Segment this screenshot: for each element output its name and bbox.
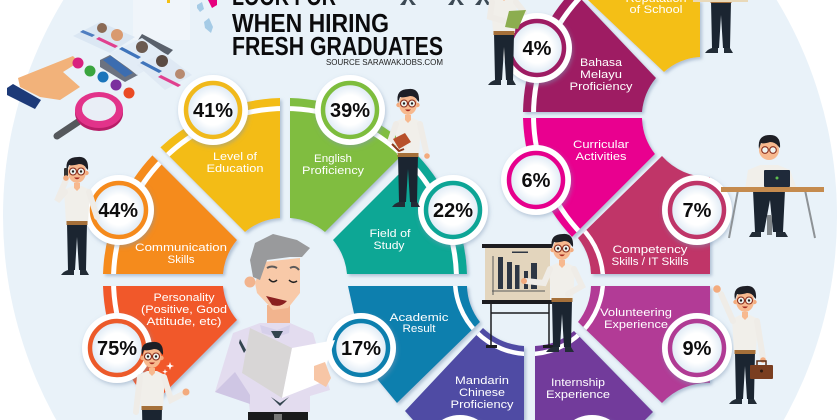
panel: Academic Result segment: Academic [390, 312, 449, 324]
panel: Bahasa Melayu Proficiency segment: Melayu [580, 69, 622, 81]
panel: Communication Skills segment: Skills [168, 254, 195, 266]
badge: 44% [84, 175, 154, 245]
panel: Internship Experience segment: Internship [551, 377, 605, 389]
panel: English Proficiency segment [290, 98, 410, 232]
panel: Level of Education segment: Level of [213, 151, 258, 163]
panel: Internship Experience segment [535, 331, 653, 420]
illustration: man on phone (Communication) [57, 157, 97, 275]
panel: Internship Experience segment: Experience [546, 389, 610, 401]
panel: English Proficiency segment: English [314, 153, 352, 165]
panel: Communication Skills segment: Communication [135, 242, 227, 254]
badge: 44%: 44% [98, 200, 138, 222]
panel: Field of Study segment: Study [374, 240, 405, 252]
badge: 9% [662, 313, 732, 383]
panel: Reputation of School segment: of School [630, 4, 682, 16]
badge: 41%: 41% [193, 100, 233, 122]
panel: Curricular Activities segment: Curricular [573, 139, 629, 151]
badge: 41% [178, 75, 248, 145]
illustration: presentation board with bar chart [482, 244, 554, 348]
panel: Personality segment: Personality [154, 292, 215, 304]
badge: 39% [315, 75, 385, 145]
panel: Personality segment [103, 286, 237, 405]
illustration: manager reading paper [215, 234, 335, 420]
badge: 22% [418, 175, 488, 245]
badge: 7% [662, 175, 732, 245]
panel: Mandarin Chinese Proficiency segment: Chinese [459, 387, 505, 399]
panel: Academic Result segment: Result [402, 323, 436, 335]
badge: 75%: 75% [97, 338, 137, 360]
badge: 9%: 9% [683, 338, 712, 360]
badge: 17%: 17% [341, 338, 381, 360]
illustration: resumes, hand and magnifier [7, 22, 192, 136]
icon: coloured title diamonds [167, 0, 217, 33]
small figure feet at the top edge [400, 0, 491, 5]
panel: Competency Skills segment: Competency [612, 244, 688, 256]
badge: 22%: 22% [433, 200, 473, 222]
panel: Volunteering Experience segment: Volunteering [600, 307, 672, 319]
panel: Reputation of School segment [588, 0, 700, 72]
panel: English Proficiency segment: Proficiency [302, 165, 365, 177]
badge: 7%: 7% [683, 200, 712, 222]
badge: 75% [82, 313, 152, 383]
badge: 17% [326, 313, 396, 383]
badge: 6% [501, 145, 571, 215]
badge: 4% [502, 13, 572, 83]
panel: Bahasa Melayu Proficiency segment: Proficiency [570, 81, 633, 93]
panel: Curricular Activities segment: Activities [576, 151, 627, 163]
illustration: presenter [521, 234, 582, 352]
panel: Level of Education segment [160, 98, 280, 232]
panel: Volunteering Experience segment [578, 286, 710, 403]
panel: Academic Result segment [348, 286, 480, 403]
illustration: man with OK gesture (Personality) [136, 342, 190, 420]
panel: Field of Study segment: Field of [370, 228, 412, 240]
panel: Bahasa Melayu Proficiency segment: Bahasa [580, 57, 623, 69]
badge: Internship (cropped) [557, 415, 627, 420]
illustration: man at desk with laptop [721, 135, 824, 238]
badge: 6%: 6% [522, 170, 551, 192]
panel: Mandarin Chinese Proficiency segment [405, 328, 524, 420]
panel: Bahasa Melayu Proficiency segment [523, 0, 656, 112]
panel: Field of Study segment [333, 155, 467, 274]
panel: Mandarin Chinese Proficiency segment: Mandarin [455, 375, 509, 387]
illustration: man waving with briefcase [713, 285, 773, 404]
panel: Mandarin Chinese Proficiency segment: Proficiency [450, 399, 514, 411]
decorative paper panel behind title [133, 0, 190, 40]
title: WHEN HIRING [232, 8, 389, 38]
panel: Personality segment: (Positive, Good [141, 304, 227, 316]
panel: Level of Education segment: Education [206, 163, 264, 175]
panel: Communication Skills segment [103, 155, 237, 274]
panel: Competency Skills segment [578, 156, 710, 274]
title [232, 0, 443, 67]
badge: 39%: 39% [330, 100, 370, 122]
panel: Personality segment: Attitude, etc) [146, 316, 222, 328]
illustration: man with book (English) [391, 89, 430, 207]
badge: 4%: 4% [523, 38, 552, 60]
illustration: man holding board [693, 0, 748, 53]
panel: Curricular Activities segment [523, 118, 655, 237]
panel: Competency Skills segment: Skills / IT Skills [612, 256, 689, 268]
panel: Volunteering Experience segment: Experience [604, 319, 668, 331]
illustration: man with clipboard [488, 0, 526, 85]
title: FRESH GRADUATES [232, 31, 443, 61]
title: SOURCE SARAWAKJOBS.COM [326, 58, 443, 67]
badge: Mandarin (cropped) [425, 415, 495, 420]
